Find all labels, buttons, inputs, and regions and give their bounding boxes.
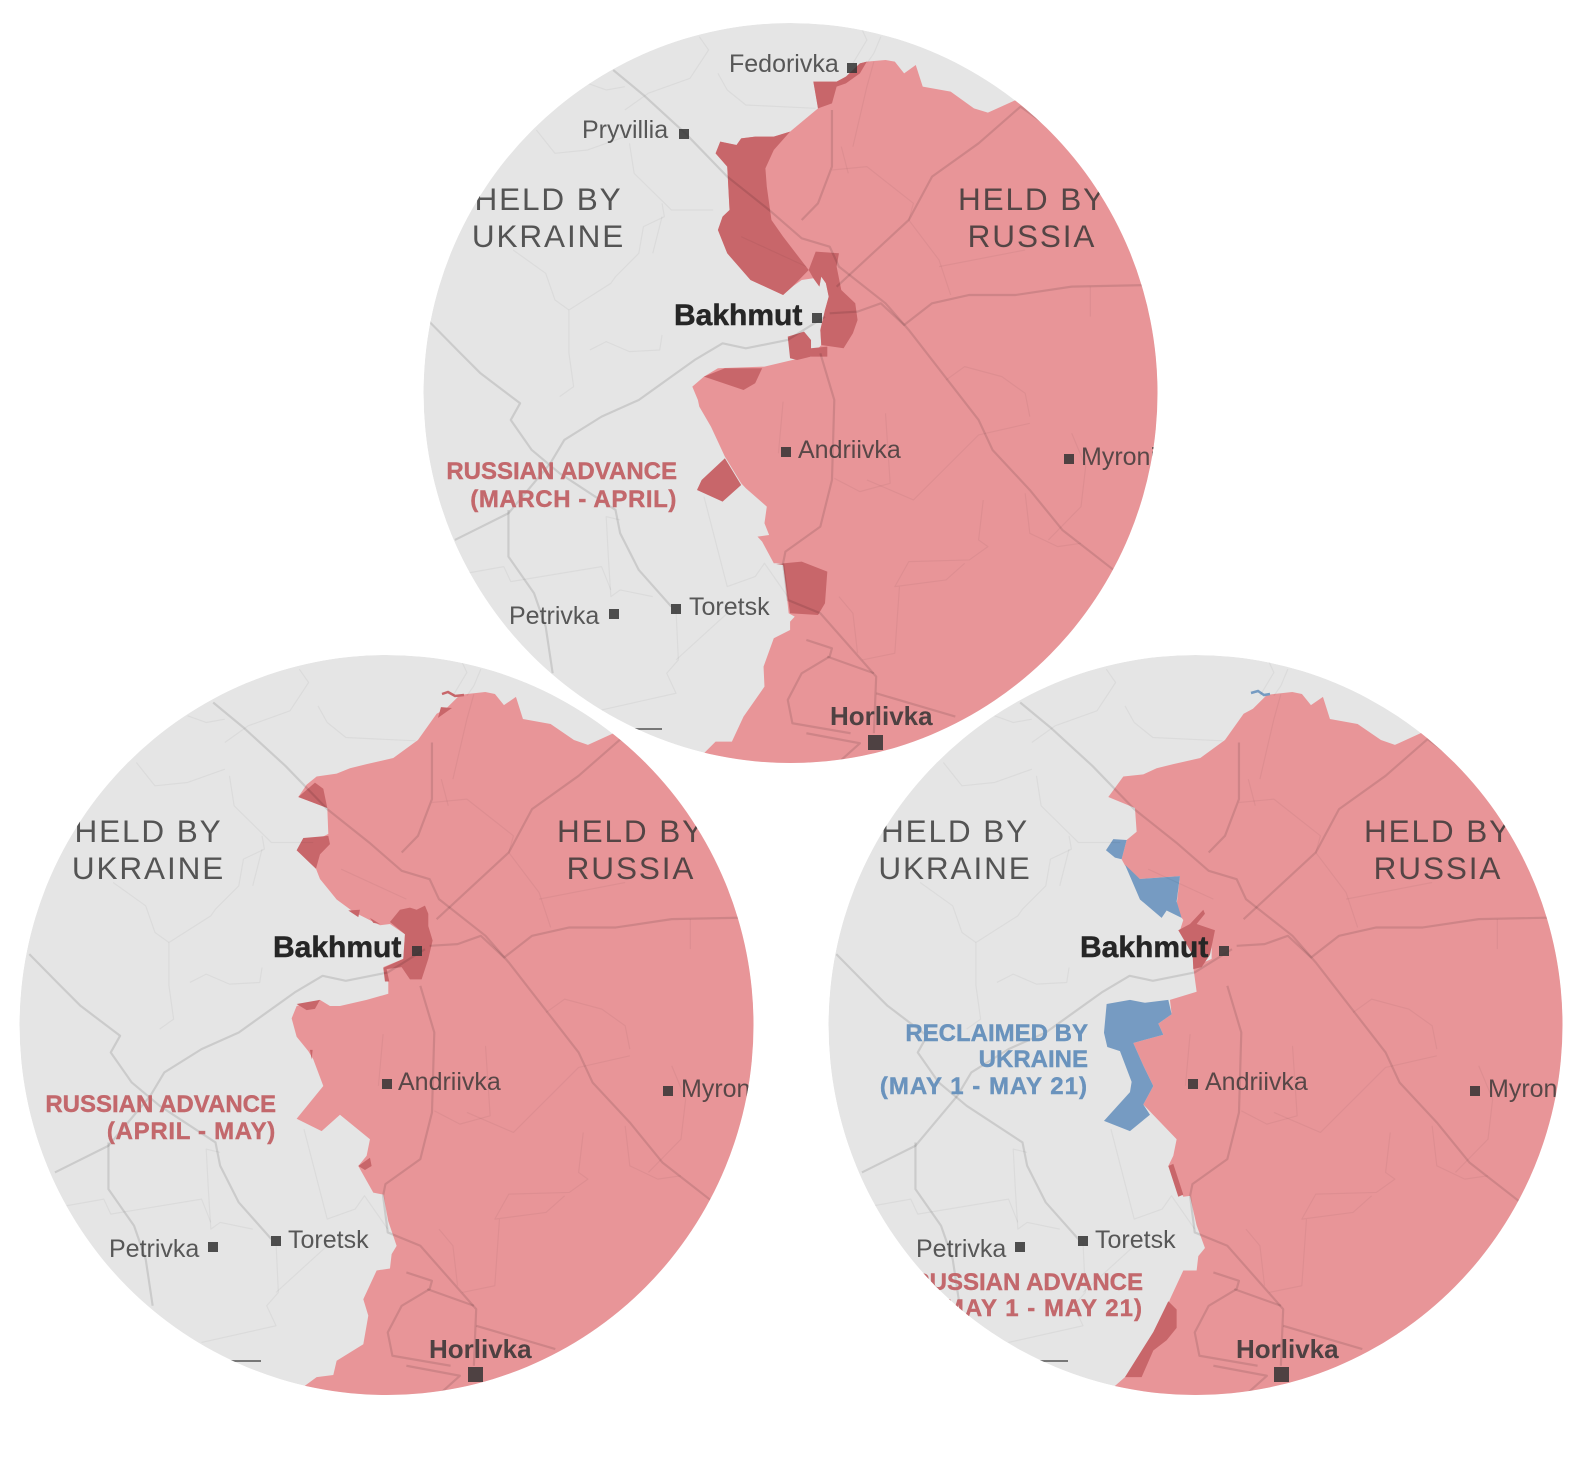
label: Russian advance: (APRIL - MAY) bbox=[107, 1118, 276, 1145]
town: Myron: Myronivskyi bbox=[1081, 443, 1212, 471]
label: Russian advance: RUSSIAN ADVANCE bbox=[45, 1091, 276, 1118]
town: Pryvillia bbox=[584, 120, 689, 143]
town: Andriivka: Andriivka bbox=[798, 436, 901, 464]
label: held by Russia: RUSSIA bbox=[1374, 850, 1502, 886]
road network bbox=[29, 662, 750, 1392]
label: held by Ukraine: UKRAINE bbox=[878, 850, 1032, 886]
label: Russian advance: RUSSIAN ADVANCE bbox=[912, 1269, 1143, 1296]
scale dash bbox=[228, 1360, 261, 1362]
town: Bakhmut: Bakhmut bbox=[674, 299, 802, 332]
label: held by Russia: HELD BY bbox=[958, 181, 1106, 217]
town: Myron bbox=[663, 1080, 748, 1102]
road network bbox=[429, 30, 1150, 760]
label: Russian advance: RUSSIAN ADVANCE bbox=[446, 458, 677, 485]
label: reclaimed by Ukraine: (MAY 1 - MAY 21) bbox=[880, 1073, 1088, 1100]
label: held by Ukraine: HELD BY bbox=[881, 813, 1029, 849]
label: held by Ukraine: HELD BY bbox=[74, 813, 223, 849]
label: held by Russia: RUSSIA bbox=[968, 218, 1096, 254]
town: Toretsk: Toretsk bbox=[288, 1226, 369, 1254]
city: Horlivka: Horlivka bbox=[429, 1334, 532, 1364]
city: Horlivka bbox=[430, 1339, 532, 1382]
label: held by Ukraine: UKRAINE bbox=[72, 850, 225, 886]
map background bbox=[828, 655, 1420, 1386]
label: Russian advance: (MARCH - APRIL) bbox=[470, 486, 677, 513]
label: reclaimed by Ukraine: UKRAINE bbox=[979, 1046, 1088, 1073]
town: Bakhmut: Bakhmut bbox=[1080, 931, 1208, 964]
town: Myron: Myronivskyi bbox=[681, 1075, 812, 1103]
scale dash bbox=[1038, 1360, 1068, 1362]
label: held by Russia: HELD BY bbox=[1364, 813, 1512, 849]
town: Bakhmut: Bakhmut bbox=[273, 931, 401, 964]
road network bbox=[836, 662, 1557, 1392]
town: Bakhmut bbox=[676, 303, 822, 326]
town: Toretsk bbox=[271, 1230, 369, 1248]
town: Toretsk: Toretsk bbox=[689, 593, 770, 621]
Russian advance areas, May 1 to May 21 bbox=[1125, 910, 1215, 1377]
scale dash bbox=[633, 728, 662, 730]
area held by Russia bbox=[692, 60, 1158, 763]
city: Horlivka bbox=[832, 706, 933, 750]
town: Petrivka bbox=[111, 1239, 218, 1257]
panel: right map, May 1 to May 21 bbox=[828, 655, 1582, 1455]
label: reclaimed by Ukraine: RECLAIMED BY bbox=[905, 1020, 1088, 1047]
label: held by Russia: HELD BY bbox=[557, 813, 705, 849]
town: Toretsk: Toretsk bbox=[1095, 1226, 1176, 1254]
panel: top map, March to April bbox=[424, 23, 1158, 763]
area held by Russia bbox=[1108, 692, 1562, 1395]
town: Andriivka: Andriivka bbox=[398, 1068, 501, 1096]
map background bbox=[424, 23, 1015, 752]
town: Fedorivka: Fedorivka bbox=[729, 50, 839, 78]
areas reclaimed by Ukraine bbox=[1104, 839, 1182, 1131]
label: held by Russia: RUSSIA bbox=[567, 850, 695, 886]
town: Fedorivka bbox=[731, 54, 857, 73]
label: held by Ukraine: UKRAINE bbox=[472, 218, 625, 254]
label: held by Ukraine: HELD BY bbox=[474, 181, 623, 217]
town: Toretsk bbox=[671, 597, 770, 615]
town: Myron bbox=[1064, 447, 1154, 470]
town: Petrivka bbox=[511, 606, 619, 624]
city: Horlivka: Horlivka bbox=[1236, 1334, 1339, 1364]
Russian advance areas, April to May bbox=[297, 707, 452, 1170]
area held by Russia bbox=[292, 692, 754, 1395]
town: Andriivka bbox=[382, 1072, 501, 1090]
map background bbox=[20, 655, 612, 1386]
city: Horlivka: Horlivka bbox=[830, 701, 933, 731]
city: Horlivka bbox=[1236, 1334, 1339, 1382]
Russian advance areas, March to April bbox=[697, 62, 867, 615]
town: Bakhmut bbox=[274, 935, 422, 958]
town: Petrivka: Petrivka bbox=[509, 602, 599, 630]
Russian advance: northern sliver bbox=[442, 692, 464, 696]
town: Petrivka: Petrivka bbox=[109, 1235, 199, 1263]
label: Russian advance: (MAY 1 - MAY 21) bbox=[935, 1295, 1143, 1322]
panel: left map, April to May bbox=[20, 655, 754, 1395]
town: Andriivka: Andriivka bbox=[1205, 1068, 1308, 1096]
town: Pryvillia: Pryvillia bbox=[582, 116, 668, 144]
town: Petrivka: Petrivka bbox=[916, 1235, 1006, 1263]
reclaimed: northern sliver bbox=[1251, 691, 1270, 695]
town: Andriivka bbox=[781, 440, 901, 458]
